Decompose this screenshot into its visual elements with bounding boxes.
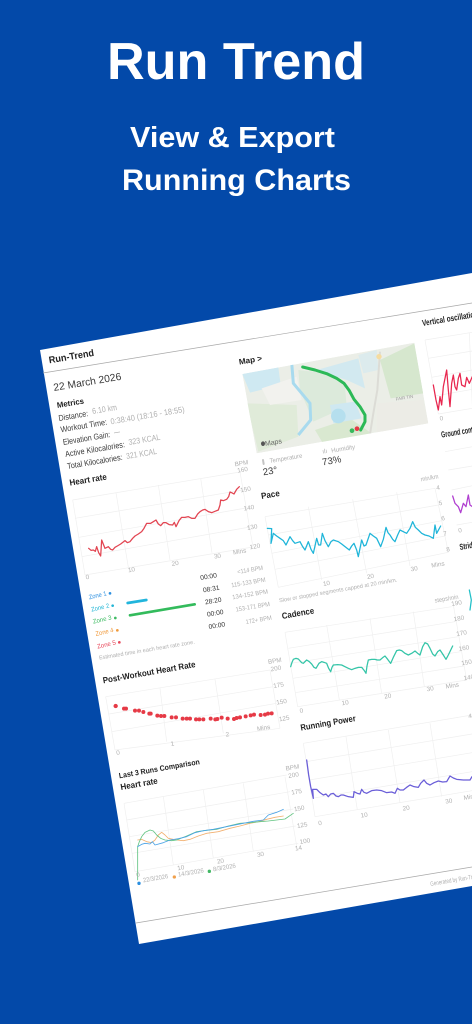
date: 22 March 2026 [53,372,122,394]
axis labels: 140 [243,504,255,513]
map image: FAIR TIN [395,394,414,402]
chart: cadence [279,577,472,715]
subtitle: Running Charts [122,164,351,197]
axis labels: 20 [171,560,180,568]
axis labels: 160 [237,466,249,475]
axis labels: 170 [456,629,468,638]
metrics list: 323 KCAL [128,432,161,447]
zone labels: Zone 4 [95,627,115,638]
axis labels: Mins [445,682,460,691]
metrics list: Total Kilocalories: [66,452,123,471]
axis labels: BPM [285,763,300,773]
axis labels: 0 [85,574,90,581]
axis labels: 5 [438,500,443,507]
zone ranges: 172+ BPM [245,615,272,626]
metrics list: 0:38:40 (18:16 - 18:55) [110,404,185,426]
panel: right edge charts: 0 [439,415,444,423]
axis labels: 30 [445,797,453,806]
axis labels: 1 [170,740,175,748]
stride chart edge [469,590,471,610]
metrics list [58,402,185,471]
axis labels: Mins [431,561,445,570]
metrics list: Active Kilocalories: [64,439,126,459]
zone labels: Zone 2 [91,603,110,614]
metrics list: — [113,426,121,437]
temperature: 23° [262,465,278,478]
zone durations [200,572,226,631]
heading: cadence: Cadence [281,605,315,621]
axis labels [299,594,472,715]
legend [137,863,237,885]
axis labels: 150 [294,805,306,813]
zone ranges: 134-152 BPM [232,588,269,601]
metrics list: 321 KCAL [125,446,158,461]
zone durations: 00:00 [208,621,226,631]
app name: Run-Trend [48,348,95,366]
axis labels: steps/min [434,594,459,605]
zone note: Estimated time in each heart rate zone. [99,640,196,662]
axis labels: 180 [453,615,465,623]
zone ranges: 115-133 BPM [231,577,266,589]
axis labels: 175 [291,788,303,797]
axis labels: 4 [436,484,441,492]
axis labels: 0 [136,871,141,879]
panel: right edge charts [421,309,472,552]
chart: pace [260,473,451,588]
axis labels: min/km [420,473,439,483]
axis labels: 20 [367,573,375,581]
axis labels [136,763,311,879]
legend: 22/3/2026 [143,873,169,884]
temperature [262,453,303,478]
heading: map: Map > [238,354,263,367]
axis labels: 190 [451,599,463,608]
pace line [267,522,441,557]
axis labels [323,473,451,588]
icon: thermometer [262,459,265,465]
chart: running power [300,590,472,888]
axis labels: Mins [233,548,247,557]
metrics heading: Metrics [56,396,85,410]
axis labels: BPM [234,459,249,468]
metrics list: 6.10 km [91,402,118,416]
vertical oscillation line [433,370,472,410]
map image [242,343,428,453]
map image: Maps [265,438,283,448]
run lines [138,809,293,880]
zone labels [88,590,121,651]
axis labels: 10 [360,811,369,820]
zone durations: 00:00 [207,609,224,619]
axis labels: 10 [323,580,331,588]
axis labels: 30 [426,685,435,693]
heading: running power: Running Power [300,713,357,733]
recovery dots [113,704,274,721]
humidity: ılı [322,448,328,456]
axis labels: 2 [225,731,230,739]
zone ranges: <114 BPM [237,565,264,576]
axis labels: 30 [410,565,419,573]
axis labels: 14 [295,844,303,853]
axis labels: 20 [384,692,392,701]
axis labels: 7 [443,530,448,538]
axis labels: 0 [116,749,121,757]
axis labels: 10 [341,699,350,707]
zone labels: Zone 1 [88,590,108,601]
zone labels: Zone 3 [92,614,113,626]
axis labels: 20 [217,857,225,866]
axis labels: 150 [276,698,288,707]
subtitle: View & Export [130,122,335,154]
axis labels: 10 [177,864,185,872]
axis labels: 125 [297,821,309,830]
ground contact line [453,495,472,513]
axis labels: 8 [446,546,451,554]
zone ranges: 153-171 BPM [235,601,271,614]
axis labels: 200 [288,771,300,780]
cadence line [291,643,453,673]
title: Run Trend [107,33,365,91]
axis labels: 130 [247,523,259,532]
heading: post-workout heart rate: Post-Workout Heart Rate [102,659,196,685]
heading: pace: Pace [260,488,281,501]
axis labels: 0 [318,820,323,827]
axis labels: 100 [299,837,311,846]
zone labels: Zone 5 [97,639,117,651]
humidity: Humidity [331,444,356,455]
axis labels [318,713,472,827]
heading: heart rate: Heart rate [69,472,108,488]
panel: heart rate zones [88,565,272,662]
zone bars [128,600,195,615]
pace note: Slow or stopped segments capped at 20 min/km. [279,577,398,604]
axis labels: 20 [402,804,411,813]
heart rate line [89,487,239,556]
heading: heart rate: Heart rate [120,776,159,792]
axis labels [116,657,291,757]
metrics list: Workout Time: [60,417,108,434]
zone durations: 00:00 [200,572,218,582]
panel: right edge charts: 0 [458,527,463,535]
zone ranges [231,565,272,626]
axis labels: BPM [268,657,282,666]
temperature: Temperature [269,453,303,465]
axis labels: 0 [299,707,304,715]
chart: last 3 runs comparison [118,757,311,885]
axis labels: 30 [214,552,222,561]
panel: run summary metrics [48,348,185,471]
zone durations: 08:31 [203,585,220,594]
humidity [321,444,356,468]
metrics list: Elevation Gain: [62,429,111,447]
axis labels: 175 [273,681,285,690]
metrics list: Distance: [58,408,89,423]
legend: 14/3/2026 [178,867,205,879]
subtitle [122,122,351,197]
axis labels: 10 [128,566,136,574]
zone durations: 28:20 [205,597,222,606]
axis labels: 125 [279,715,291,723]
axis labels: 150 [240,486,252,494]
axis labels [85,459,261,581]
axis labels: 120 [249,543,261,551]
axis labels: Mins [257,724,271,733]
map panel [238,343,428,478]
axis labels: 200 [270,665,282,673]
chart: post-workout heart rate [102,657,291,757]
humidity: 73% [321,454,343,468]
heading: comparison: Last 3 Runs Comparison [118,757,201,780]
axis labels: 160 [458,644,470,653]
chart: heart rate [69,459,261,581]
panel: tilted report page [40,273,472,944]
axis labels: 30 [257,851,265,859]
power line [307,760,472,798]
legend: 8/3/2026 [213,863,237,873]
axis labels: 6 [441,515,446,523]
